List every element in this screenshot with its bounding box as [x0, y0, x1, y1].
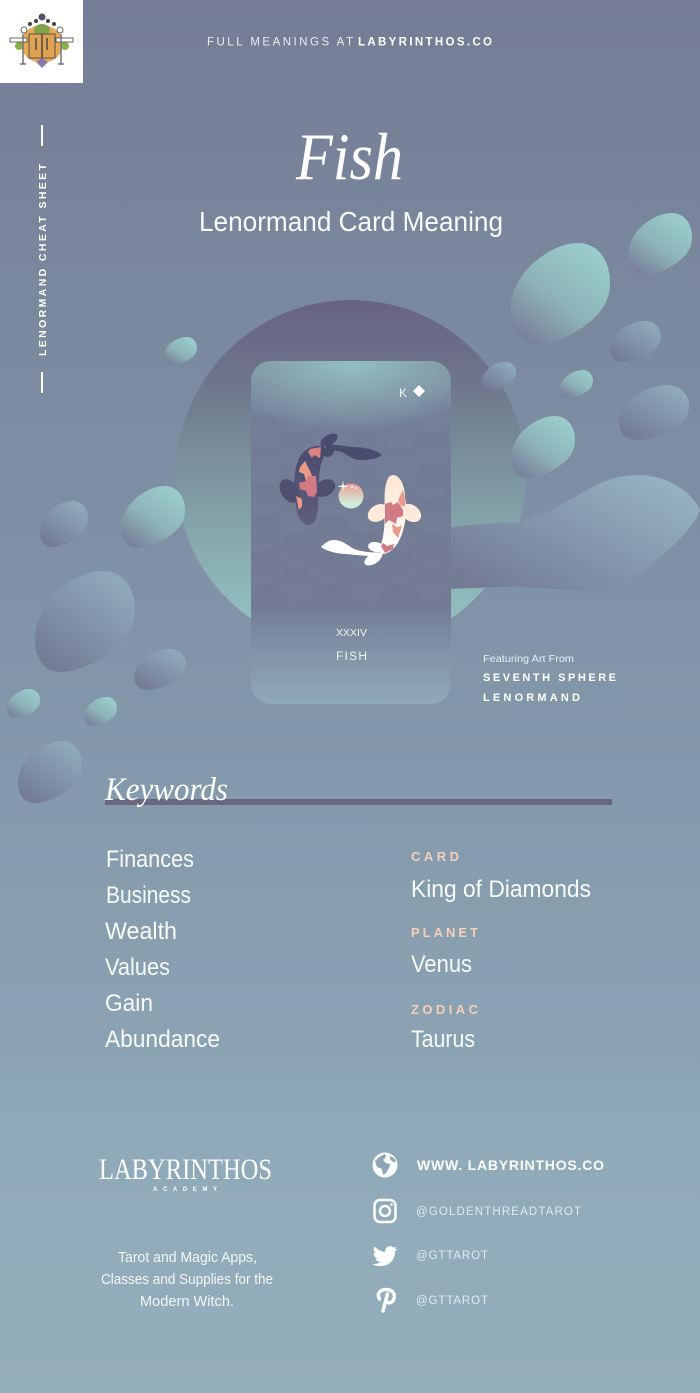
icon: globe	[372, 1152, 398, 1178]
card suit: K	[399, 386, 407, 400]
light koi	[321, 475, 425, 568]
large circle	[176, 300, 526, 650]
card number: XXXIV	[336, 628, 367, 639]
keywords divider	[105, 799, 612, 805]
card correspondence: CARD	[411, 849, 459, 864]
tarot card	[251, 361, 451, 704]
flowing blob	[430, 475, 700, 591]
title: Fish	[295, 120, 403, 194]
footer brand logo: ACADEMY	[153, 1187, 217, 1193]
header link	[207, 36, 492, 48]
art credit: LENORMAND	[483, 692, 580, 704]
zodiac correspondence	[411, 1002, 479, 1053]
keywords list: Values	[105, 954, 170, 981]
icon: instagram	[374, 1200, 396, 1222]
header link: FULL MEANINGS AT	[207, 36, 353, 48]
art credit: Featuring Art From	[483, 653, 574, 665]
keywords heading: Keywords	[104, 772, 228, 808]
card name: FISH	[336, 649, 367, 663]
dark koi	[275, 431, 382, 525]
instagram handle: @GOLDENTHREADTAROT	[416, 1206, 581, 1218]
pinterest handle: @GTTAROT	[416, 1295, 488, 1307]
zodiac correspondence: ZODIAC	[411, 1002, 479, 1017]
card correspondence: King of Diamonds	[411, 876, 591, 903]
card wave pattern	[197, 380, 566, 632]
keywords list	[105, 846, 220, 1053]
footer tagline: Classes and Supplies for the	[101, 1272, 273, 1288]
keywords list: Gain	[105, 990, 153, 1017]
zodiac correspondence: Taurus	[411, 1026, 475, 1053]
moon	[338, 480, 364, 508]
planet correspondence	[411, 925, 478, 978]
art credit: SEVENTH SPHERE	[483, 672, 616, 684]
website link: WWW. LABYRINTHOS.CO	[417, 1157, 604, 1173]
planet correspondence: Venus	[411, 951, 472, 978]
keywords list: Finances	[106, 846, 194, 873]
keywords list: Abundance	[105, 1026, 220, 1053]
footer tagline: Modern Witch.	[140, 1294, 234, 1310]
footer tagline	[101, 1250, 273, 1310]
header link: LABYRINTHOS.CO	[358, 36, 492, 48]
footer brand logo: LABYRINTHOS	[99, 1153, 272, 1186]
footer background	[0, 1080, 700, 1393]
icon: pinterest	[378, 1290, 394, 1311]
footer brand logo	[99, 1153, 272, 1193]
icon: twitter	[372, 1246, 398, 1266]
twitter handle: @GTTAROT	[416, 1250, 488, 1262]
keywords list: Business	[106, 882, 191, 909]
subtitle: Lenormand Card Meaning	[199, 206, 503, 237]
logo badge	[0, 0, 83, 83]
floating blobs	[7, 213, 692, 803]
card correspondence	[411, 849, 591, 903]
card top glow	[251, 361, 451, 424]
sidebar label: LENORMAND CHEAT SHEET	[37, 163, 49, 356]
planet correspondence: PLANET	[411, 925, 478, 940]
art credit	[483, 653, 616, 704]
keywords list: Wealth	[105, 918, 177, 945]
footer tagline: Tarot and Magic Apps,	[118, 1250, 257, 1266]
card suit	[399, 385, 425, 400]
